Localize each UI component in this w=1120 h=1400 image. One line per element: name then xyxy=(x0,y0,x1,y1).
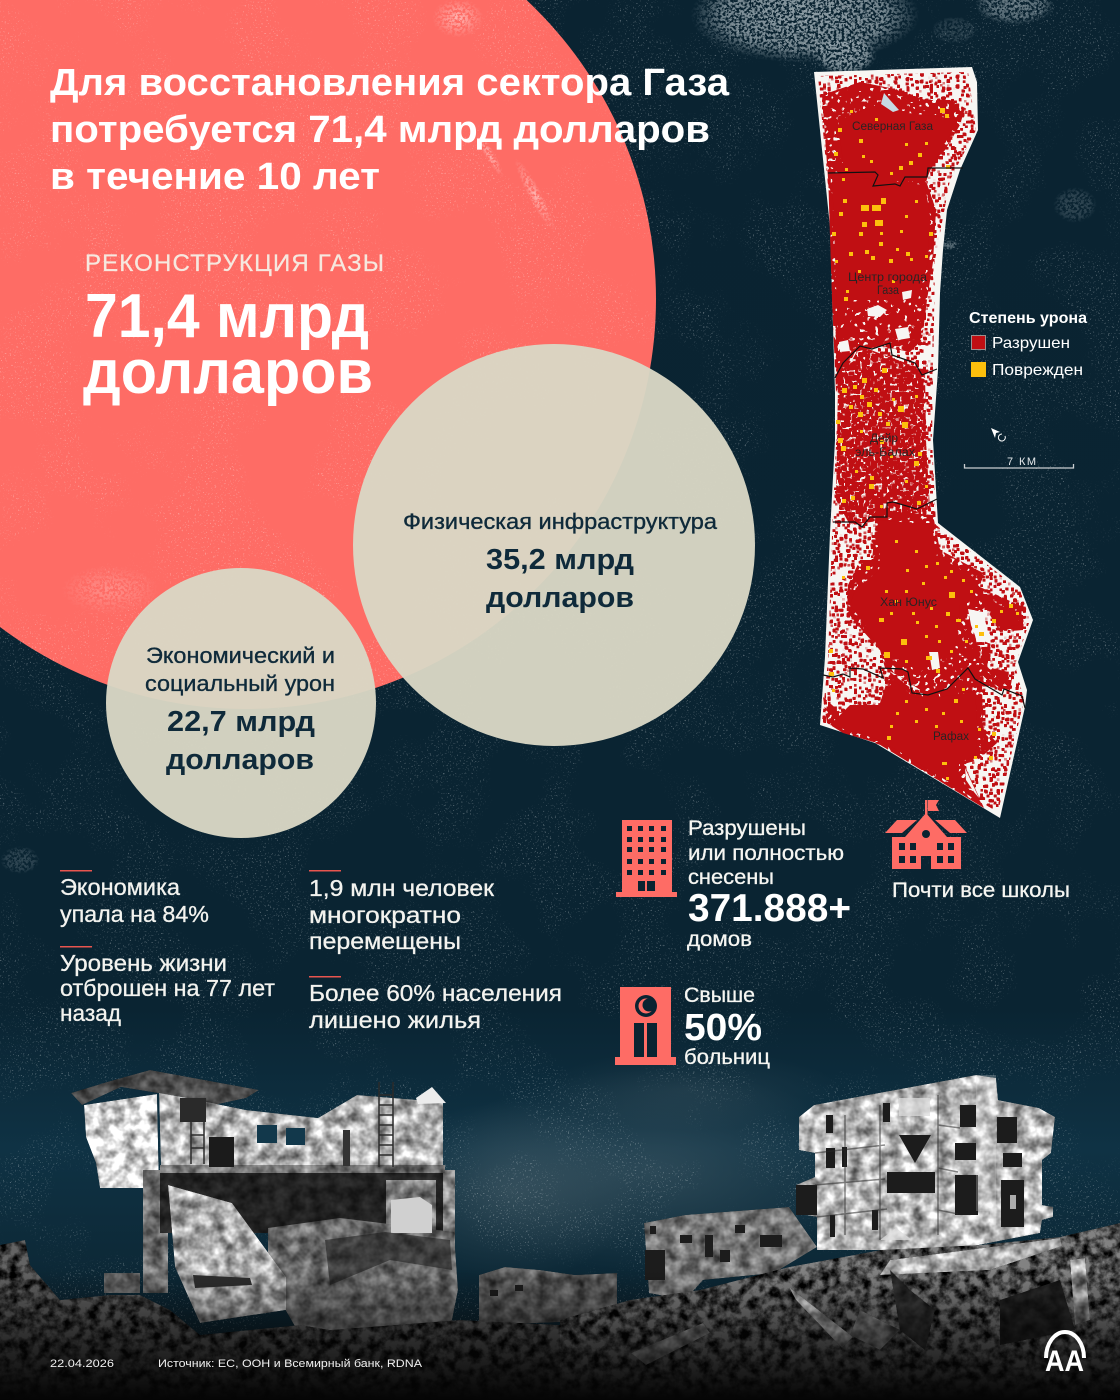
stat: schools: Почти все школы xyxy=(892,879,1070,902)
total: 71,4 billion dollars xyxy=(83,282,373,407)
dense destroyed buildings: Rafah xyxy=(823,670,997,808)
stat: hospitals: 50% xyxy=(684,1007,762,1049)
big coral circle xyxy=(0,0,656,709)
medium destroyed buildings: Deir al-Balah xyxy=(836,346,930,525)
stat: hospitals xyxy=(684,984,770,1069)
bottom fade xyxy=(0,1270,1120,1400)
sparse destroyed buildings xyxy=(818,72,1030,812)
value: 22,7 billion: 22,7 млрд xyxy=(167,706,315,738)
floor lines xyxy=(815,1095,960,1240)
map of Gaza damage xyxy=(814,67,1033,818)
district labels: Газа xyxy=(877,285,900,297)
circle: physical infrastructure xyxy=(353,344,755,746)
yellow damaged buildings xyxy=(829,108,1019,780)
district labels: Северная Газа xyxy=(852,121,934,133)
list: population: перемещены xyxy=(309,928,461,954)
clouds texture xyxy=(0,0,1097,874)
label: economic and social damage xyxy=(145,643,335,696)
list: economy: Уровень жизни xyxy=(60,950,227,976)
stat: destroyed homes xyxy=(687,817,851,951)
logo: Anadolu Agency xyxy=(1045,1332,1084,1378)
title xyxy=(50,62,730,198)
list: economy: упала на 84% xyxy=(60,901,209,927)
map legend: Разрушен xyxy=(992,335,1070,352)
value: 35,2 billion xyxy=(486,544,634,614)
label: economic and social damage: Экономический и xyxy=(146,643,335,668)
title: в течение 10 лет xyxy=(50,156,380,198)
list: economy: отброшен на 77 лет xyxy=(60,975,275,1001)
solid red cores xyxy=(830,104,1020,795)
map legend: Поврежден xyxy=(992,362,1083,379)
logo: Anadolu Agency: AA xyxy=(1045,1345,1084,1378)
dense destroyed buildings: Gaza city xyxy=(828,172,936,392)
stat: destroyed homes: домов xyxy=(687,928,752,951)
footer: date and source: Источник: ЕС, ООН и Всемирный банк, RDNA xyxy=(158,1358,423,1370)
stat: destroyed homes: 371.888+ xyxy=(688,887,851,930)
subtitle: reconstruction of Gaza: РЕКОНСТРУКЦИЯ ГАЗЫ xyxy=(85,250,384,277)
dense destroyed buildings: Khan Younis xyxy=(847,510,1023,693)
district labels: Центр города xyxy=(848,272,928,284)
pond xyxy=(881,93,899,112)
scale bar xyxy=(964,456,1074,468)
total: 71,4 billion dollars: 71,4 млрд xyxy=(85,282,369,351)
district labels: эль-Балах xyxy=(855,447,915,459)
list: population xyxy=(309,870,562,1033)
list: economy: назад xyxy=(60,1000,122,1026)
scratches on coral xyxy=(60,0,561,615)
icon: school xyxy=(885,800,967,869)
label: physical infrastructure: Физическая инфраструктура xyxy=(403,509,718,534)
stat: destroyed homes: снесены xyxy=(688,866,774,889)
white gaps xyxy=(839,290,991,798)
district borders xyxy=(823,168,1025,708)
value: 35,2 billion: долларов xyxy=(486,582,634,614)
list: population: многократно xyxy=(309,902,461,928)
list: population: лишено жилья xyxy=(309,1007,481,1033)
map land xyxy=(814,67,1033,818)
footer: date and source: 22.04.2026 xyxy=(50,1358,114,1370)
list: economy: Экономика xyxy=(60,874,180,900)
stat: hospitals: Свыше xyxy=(684,984,755,1007)
footer: date and source xyxy=(50,1358,423,1370)
icon: hospital xyxy=(615,987,676,1065)
dense destroyed buildings: north xyxy=(822,82,965,192)
district labels: Дейр xyxy=(870,433,898,445)
icon: apartment building xyxy=(616,820,677,897)
value: 22,7 billion: долларов xyxy=(166,744,314,776)
district labels: Хан Юнус xyxy=(880,597,937,609)
title: Для восстановления сектора Газа xyxy=(50,62,730,104)
ruined building: right xyxy=(796,1075,1055,1250)
background ruins windows xyxy=(490,1225,782,1296)
district labels: Рафах xyxy=(933,731,969,743)
list: population: Более 60% населения xyxy=(309,980,562,1006)
title: потребуется 71,4 млрд долларов xyxy=(50,109,710,151)
total: 71,4 billion dollars: долларов xyxy=(83,338,373,407)
scale bar: 7 КМ xyxy=(1007,456,1036,468)
list: economy xyxy=(60,870,275,1026)
background ruins xyxy=(104,1207,817,1325)
map legend xyxy=(969,310,1087,379)
label: economic and social damage: социальный урон xyxy=(145,671,335,696)
district labels xyxy=(848,121,969,743)
rubble: left xyxy=(0,1240,640,1400)
value: 35,2 billion: 35,2 млрд xyxy=(486,544,634,576)
stat: destroyed homes: или полностью xyxy=(688,842,844,865)
circle: economic and social damage xyxy=(106,568,376,838)
rubble: right xyxy=(560,1223,1120,1400)
stat: hospitals: больниц xyxy=(684,1046,770,1069)
value: 22,7 billion xyxy=(166,706,315,776)
stat: destroyed homes: Разрушены xyxy=(688,817,806,840)
list: population: 1,9 млн человек xyxy=(309,875,495,901)
ruined building: left xyxy=(71,1070,458,1335)
north arrow xyxy=(991,428,1005,441)
map legend: Степень урона xyxy=(969,310,1087,327)
